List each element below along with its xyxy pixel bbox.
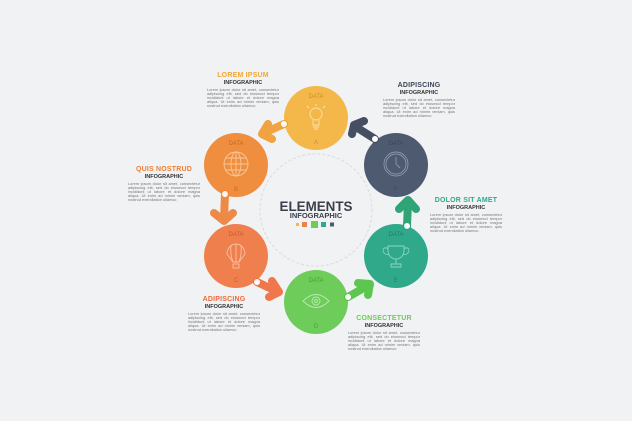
- arrows: [214, 121, 416, 300]
- text: lorem ipsum: LOREM IPSUM: [217, 72, 269, 79]
- text: quis nostrud: Lorem ipsum dolor sit amet, consectetur adipiscing elit, sed do eiusmod tempor incididunt ut labore et dolore magna aliqua. Ut enim ad minim veniam, quis nostrud exercitation ullamco: [128, 181, 200, 202]
- center title: ELEMENTS: [280, 199, 352, 214]
- circle F (top right): DATA: [388, 141, 404, 147]
- arrow D to E: [346, 283, 370, 300]
- circle D: [284, 270, 348, 334]
- circle F (top right): [364, 133, 428, 197]
- circle C: DATA: [228, 232, 244, 238]
- text: adipiscing bottom: INFOGRAPHIC: [205, 304, 243, 310]
- arrow A to B: [262, 122, 286, 139]
- arrow F to A: [352, 121, 378, 142]
- text: adipiscing bottom: Lorem ipsum dolor sit amet, consectetur adipiscing elit, sed do eiusmod tempor incididunt ut labore et dolore magna aliqua. Ut enim ad minim veniam, quis nostrud exercitation ullamco: [188, 311, 260, 332]
- text: adipiscing bottom: ADIPISCING: [203, 296, 245, 303]
- arrow C to D: [254, 280, 279, 297]
- circle A: [284, 86, 348, 150]
- center title: INFOGRAPHIC: [290, 211, 343, 220]
- text: quis nostrud: QUIS NOSTRUD: [136, 166, 192, 173]
- text: quis nostrud: INFOGRAPHIC: [145, 174, 183, 180]
- circle B: DATA: [228, 141, 244, 147]
- text: consectetur: CONSECTETUR: [356, 315, 412, 322]
- text: adipiscing bottom: [188, 296, 260, 332]
- text: dolor sit amet: Lorem ipsum dolor sit amet, consectetur adipiscing elit, sed do eiusmod tempor incididunt ut labore et dolore magna aliqua. Ut enim ad minim veniam, quis nostrud exercitation ullamco: [430, 212, 502, 233]
- circle B: B: [234, 187, 238, 193]
- circle E (bottom right): DATA: [388, 232, 404, 238]
- text: consectetur: [348, 315, 420, 351]
- text: lorem ipsum: INFOGRAPHIC: [224, 80, 262, 86]
- circle D: D: [314, 324, 319, 330]
- text: dolor sit amet: DOLOR SIT AMET: [435, 197, 497, 204]
- text: adipiscing top: Lorem ipsum dolor sit amet, consectetur adipiscing elit, sed do eiusmod tempor incididunt ut labore et dolore magna aliqua. Ut enim ad minim veniam, quis nostrud exercitation ullamco: [383, 97, 455, 118]
- circle C: C: [234, 278, 239, 284]
- circle E (bottom right): E: [394, 278, 398, 284]
- text: quis nostrud: [128, 166, 200, 202]
- circle E (bottom right): [364, 224, 428, 288]
- circle B: [204, 133, 268, 197]
- text: dolor sit amet: [430, 197, 502, 233]
- arrow E to F: [399, 200, 416, 228]
- circle C: [204, 224, 268, 288]
- circle D: DATA: [308, 278, 324, 284]
- text: adipiscing top: INFOGRAPHIC: [400, 90, 438, 96]
- text: consectetur: INFOGRAPHIC: [365, 323, 403, 329]
- text: dolor sit amet: INFOGRAPHIC: [447, 205, 485, 211]
- center title: [280, 199, 352, 228]
- text: consectetur: Lorem ipsum dolor sit amet, consectetur adipiscing elit, sed do eiusmod tempor incididunt ut labore et dolore magna aliqua. Ut enim ad minim veniam, quis nostrud exercitation ullamco: [348, 330, 420, 351]
- circle A: DATA: [308, 94, 324, 100]
- text: lorem ipsum: Lorem ipsum dolor sit amet, consectetur adipiscing elit, sed do eiusmod tempor incididunt ut labore et dolore magna aliqua. Ut enim ad minim veniam, quis nostrud exercitation ullamco: [207, 87, 279, 108]
- arrow B to C: [214, 192, 233, 221]
- text: adipiscing top: ADIPISCING: [398, 82, 440, 89]
- circle F (top right): F: [394, 187, 398, 193]
- text: adipiscing top: [383, 82, 455, 118]
- circle A: A: [314, 140, 318, 146]
- text: lorem ipsum: [207, 72, 279, 108]
- dashed center ring: [260, 154, 372, 266]
